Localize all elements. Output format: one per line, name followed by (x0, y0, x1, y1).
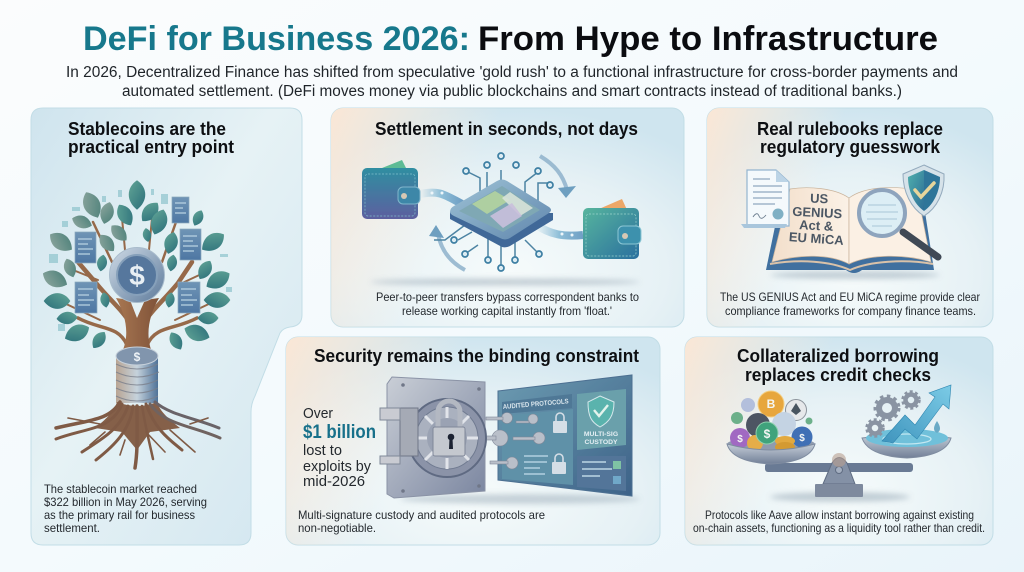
heading: rulebooks: Real rulebooks replace (757, 119, 943, 139)
crypto coins: $ (799, 433, 805, 444)
book label: EU MiCA (788, 229, 845, 248)
illustration: stablecoin tree (40, 180, 233, 468)
multi-sig label (584, 431, 618, 446)
body text: stablecoins: $322 billion in May 2026, serving (44, 495, 207, 509)
body text: rulebooks (720, 290, 980, 318)
stat: 1 billion lost: lost to (303, 443, 342, 459)
illustration: vault and screen (380, 375, 640, 504)
heading: rulebooks: regulatory guesswork (760, 137, 941, 157)
icon: dollar coin: $ (129, 260, 145, 291)
heading: settlement: Settlement in seconds, not days (375, 119, 638, 139)
body text: stablecoins: The stablecoin market reached (44, 482, 197, 496)
body text: settlement: release working capital instantly from 'float.' (402, 304, 612, 318)
circular arrows (438, 156, 567, 270)
panel: rulebooks (707, 108, 993, 327)
body text: stablecoins: settlement. (44, 521, 100, 535)
heading: stablecoins: Stablecoins are the (68, 119, 226, 139)
crypto coins: $ (764, 427, 771, 441)
body text: settlement (376, 290, 639, 318)
stat: 1 billion lost (303, 406, 376, 490)
title: From Hype to Infrastructure (478, 20, 938, 58)
crypto coins: $ (737, 434, 743, 445)
icon: shield (903, 165, 944, 216)
heading: borrowing (737, 346, 939, 385)
stat: 1 billion lost: exploits by (303, 459, 372, 475)
book label: Act & (799, 217, 834, 234)
body text: stablecoins: as the primary rail for business (44, 508, 195, 522)
coin stack (116, 347, 159, 403)
multi-sig label: CUSTODY (584, 439, 618, 446)
body text: stablecoins (44, 482, 207, 535)
illustration: balance scale (727, 385, 951, 502)
heading: stablecoins: practical entry point (68, 137, 234, 157)
illustration: wallets and chip (362, 153, 641, 286)
body text: settlement: Peer-to-peer transfers bypass correspondent banks to (376, 290, 639, 304)
panel: stablecoins (31, 108, 302, 545)
body text: security: non-negotiable. (298, 521, 376, 535)
title: DeFi for Business 2026: (83, 20, 470, 58)
icon: gears (866, 392, 920, 436)
coin stack: $ (134, 350, 141, 364)
icon: vault door (380, 377, 486, 498)
icon: padlock (438, 401, 460, 427)
heading: rulebooks (757, 119, 943, 157)
circuit traces (434, 170, 550, 268)
body text: borrowing: on-chain assets, functioning as a liquidity tool rather than credit. (693, 521, 985, 535)
stat: 1 billion lost: mid-2026 (303, 474, 365, 490)
browser screen: AUDITED PROTOCOLS (503, 398, 569, 411)
tree ledger documents (75, 197, 201, 313)
tree roots (56, 402, 220, 468)
subtitle: In 2026, Decentralized Finance has shifted from speculative 'gold rush' to a functional infrastructure for cross-border payments and (66, 64, 958, 81)
heading: security: Security remains the binding constraint (314, 346, 639, 366)
body text: rulebooks: compliance frameworks for company finance teams. (725, 304, 976, 318)
tree leaves (40, 180, 233, 352)
heading: borrowing: Collateralized borrowing (737, 346, 939, 366)
browser screen (498, 375, 632, 496)
tree branches (62, 218, 213, 350)
right scale pan (862, 429, 951, 458)
stat: 1 billion lost: Over (303, 406, 333, 422)
body text: security: Multi-signature custody and audited protocols are (298, 508, 545, 522)
icon: dollar coin (110, 248, 164, 302)
panel: security (286, 337, 660, 545)
icon: right wallet (583, 199, 641, 259)
stat: 1 billion lost: $1 billion (303, 422, 376, 443)
icon: left wallet (362, 160, 420, 219)
body text: rulebooks: The US GENIUS Act and EU MiCA regime provide clear (720, 290, 980, 304)
left scale pan (727, 444, 815, 464)
panel: settlement (331, 108, 684, 327)
icon: signed document (741, 170, 789, 228)
body text: borrowing (693, 508, 985, 535)
book label: GENIUS (792, 204, 843, 221)
book label (788, 191, 845, 248)
tree trunk (116, 298, 159, 352)
crypto coins (730, 391, 812, 452)
book label: US (810, 191, 829, 206)
subtitle: automated settlement. (DeFi moves money via public blockchains and smart contracts instead of traditional banks.) (122, 83, 902, 100)
icon: magnifier (859, 190, 938, 257)
icon: screen shield (588, 396, 614, 427)
subtitle (66, 64, 958, 100)
heading: borrowing: replaces credit checks (745, 365, 931, 385)
icon: open book (766, 188, 934, 273)
body text: borrowing: Protocols like Aave allow instant borrowing against existing (705, 508, 974, 522)
crypto coins: B (767, 397, 776, 411)
scale beam and base (765, 453, 913, 497)
heading: stablecoins (68, 119, 234, 157)
payment flow streams (420, 193, 462, 204)
left scale pan back (727, 437, 815, 451)
body text: security (298, 508, 545, 535)
panel: borrowing (685, 337, 993, 545)
icon: growth arrow (882, 385, 951, 443)
icon: chip (450, 180, 553, 247)
illustration: rulebook (741, 165, 944, 279)
multi-sig label: MULTI-SIG (584, 431, 618, 438)
title (83, 20, 938, 58)
keys (468, 412, 545, 469)
